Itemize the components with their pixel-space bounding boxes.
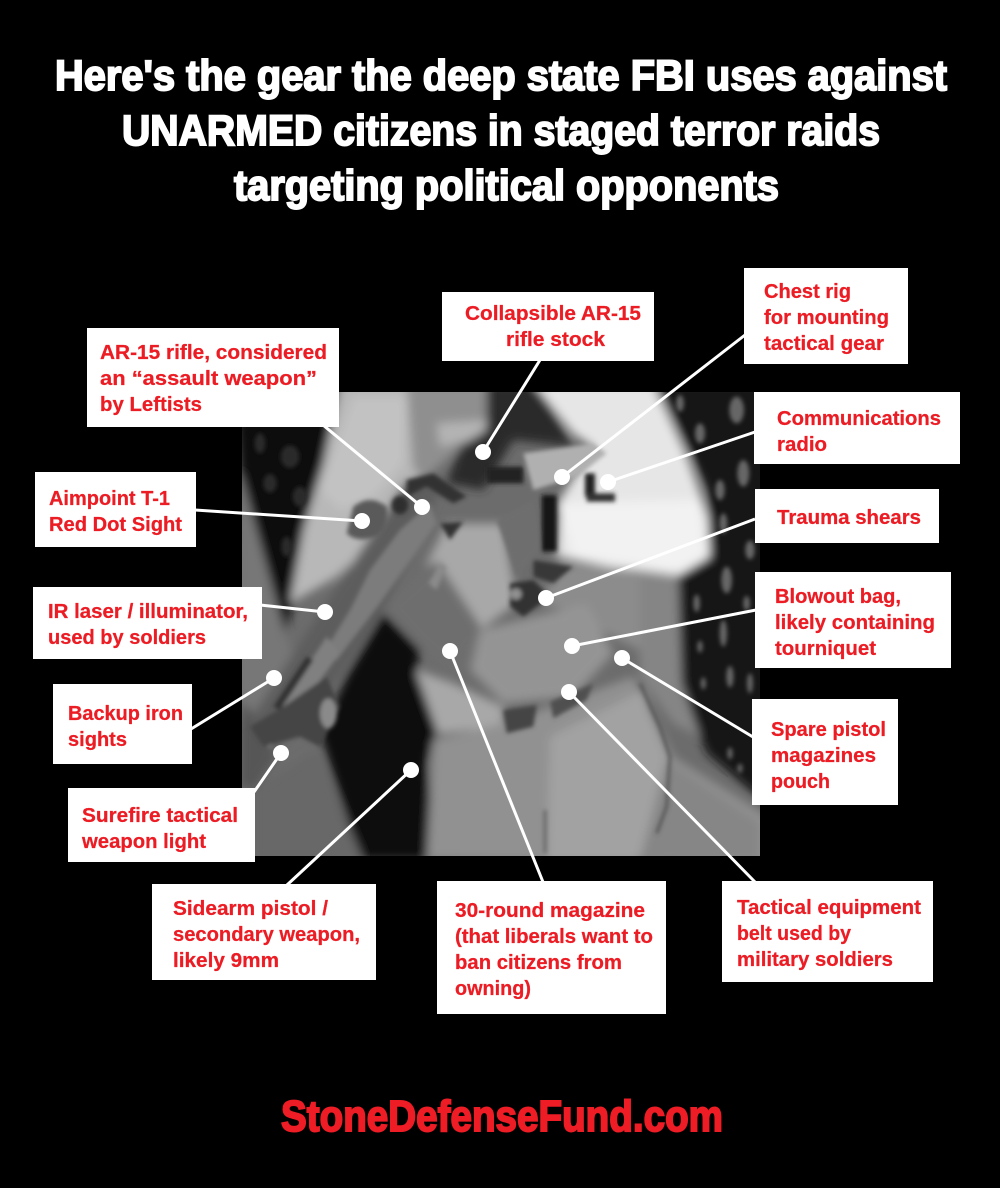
callout: collapsible rifle stock bbox=[442, 292, 654, 460]
callout: AR-15 rifle: an “assault weapon” bbox=[100, 367, 317, 390]
callout: spare pistol magazines pouch: pouch bbox=[771, 770, 830, 793]
callout: tactical equipment belt: belt used by bbox=[737, 922, 852, 945]
callout: 30-round magazine bbox=[437, 643, 666, 1014]
callout: blowout bag: tourniquet bbox=[775, 637, 876, 660]
callout: spare pistol magazines pouch bbox=[614, 650, 898, 805]
callout: chest rig: for mounting bbox=[764, 306, 889, 329]
callout: sidearm pistol: Sidearm pistol / bbox=[173, 897, 328, 920]
callout: collapsible rifle stock: Collapsible AR-15 bbox=[465, 302, 641, 325]
callout: IR laser / illuminator: used by soldiers bbox=[48, 626, 206, 649]
footer: website: StoneDefenseFund.com bbox=[281, 1092, 723, 1141]
callout: trauma shears bbox=[538, 489, 939, 606]
callout: sidearm pistol: secondary weapon, bbox=[173, 923, 360, 946]
callout: Surefire weapon light bbox=[68, 745, 289, 862]
callout: sidearm pistol: likely 9mm bbox=[173, 949, 279, 972]
callout: collapsible rifle stock: rifle stock bbox=[506, 328, 606, 351]
callout: IR laser / illuminator: IR laser / illuminator, bbox=[48, 600, 248, 623]
callout: communications radio: Communications bbox=[777, 407, 941, 430]
callout: chest rig: tactical gear bbox=[764, 332, 884, 355]
callout: blowout bag: likely containing bbox=[775, 611, 935, 634]
callout: sidearm pistol bbox=[152, 762, 419, 980]
callout: 30-round magazine: 30-round magazine bbox=[455, 899, 645, 922]
callout: AR-15 rifle: AR-15 rifle, considered bbox=[100, 341, 327, 364]
callout: spare pistol magazines pouch: Spare pistol bbox=[771, 718, 886, 741]
callout: Surefire weapon light: Surefire tactical bbox=[82, 804, 238, 827]
callout: IR laser / illuminator bbox=[33, 587, 333, 659]
callout: 30-round magazine: ban citizens from bbox=[455, 951, 622, 974]
title: Here's the gear the deep state FBI uses against bbox=[55, 52, 947, 100]
callout: communications radio: radio bbox=[777, 433, 827, 456]
callout: Aimpoint red dot sight bbox=[35, 472, 370, 547]
callout: tactical equipment belt: Tactical equipment bbox=[737, 896, 921, 919]
callout: backup iron sights bbox=[53, 670, 282, 764]
callout: tactical equipment belt: military soldiers bbox=[737, 948, 893, 971]
title bbox=[55, 52, 947, 210]
callout: chest rig: Chest rig bbox=[764, 280, 851, 303]
callout: chest rig bbox=[554, 268, 908, 485]
callout: backup iron sights: Backup iron bbox=[68, 702, 183, 725]
title: UNARMED citizens in staged terror raids bbox=[122, 107, 880, 155]
callout: backup iron sights: sights bbox=[68, 728, 127, 751]
callout: blowout bag: Blowout bag, bbox=[775, 585, 901, 608]
photo: agent in tactical gear bbox=[233, 383, 773, 863]
title: targeting political opponents bbox=[234, 162, 779, 210]
callout: Aimpoint red dot sight: Red Dot Sight bbox=[49, 513, 182, 536]
callout: spare pistol magazines pouch: magazines bbox=[771, 744, 876, 767]
callout: 30-round magazine: (that liberals want to bbox=[455, 925, 653, 948]
callout: blowout bag bbox=[564, 572, 951, 668]
callout: communications radio bbox=[600, 392, 960, 490]
callout: AR-15 rifle: by Leftists bbox=[100, 393, 202, 416]
callout: Aimpoint red dot sight: Aimpoint T-1 bbox=[49, 487, 170, 510]
callout: Surefire weapon light: weapon light bbox=[81, 830, 206, 853]
callout: trauma shears: Trauma shears bbox=[777, 506, 921, 529]
callout: AR-15 rifle bbox=[87, 328, 430, 515]
callout: 30-round magazine: owning) bbox=[455, 977, 531, 1000]
callout: tactical equipment belt bbox=[561, 684, 933, 982]
